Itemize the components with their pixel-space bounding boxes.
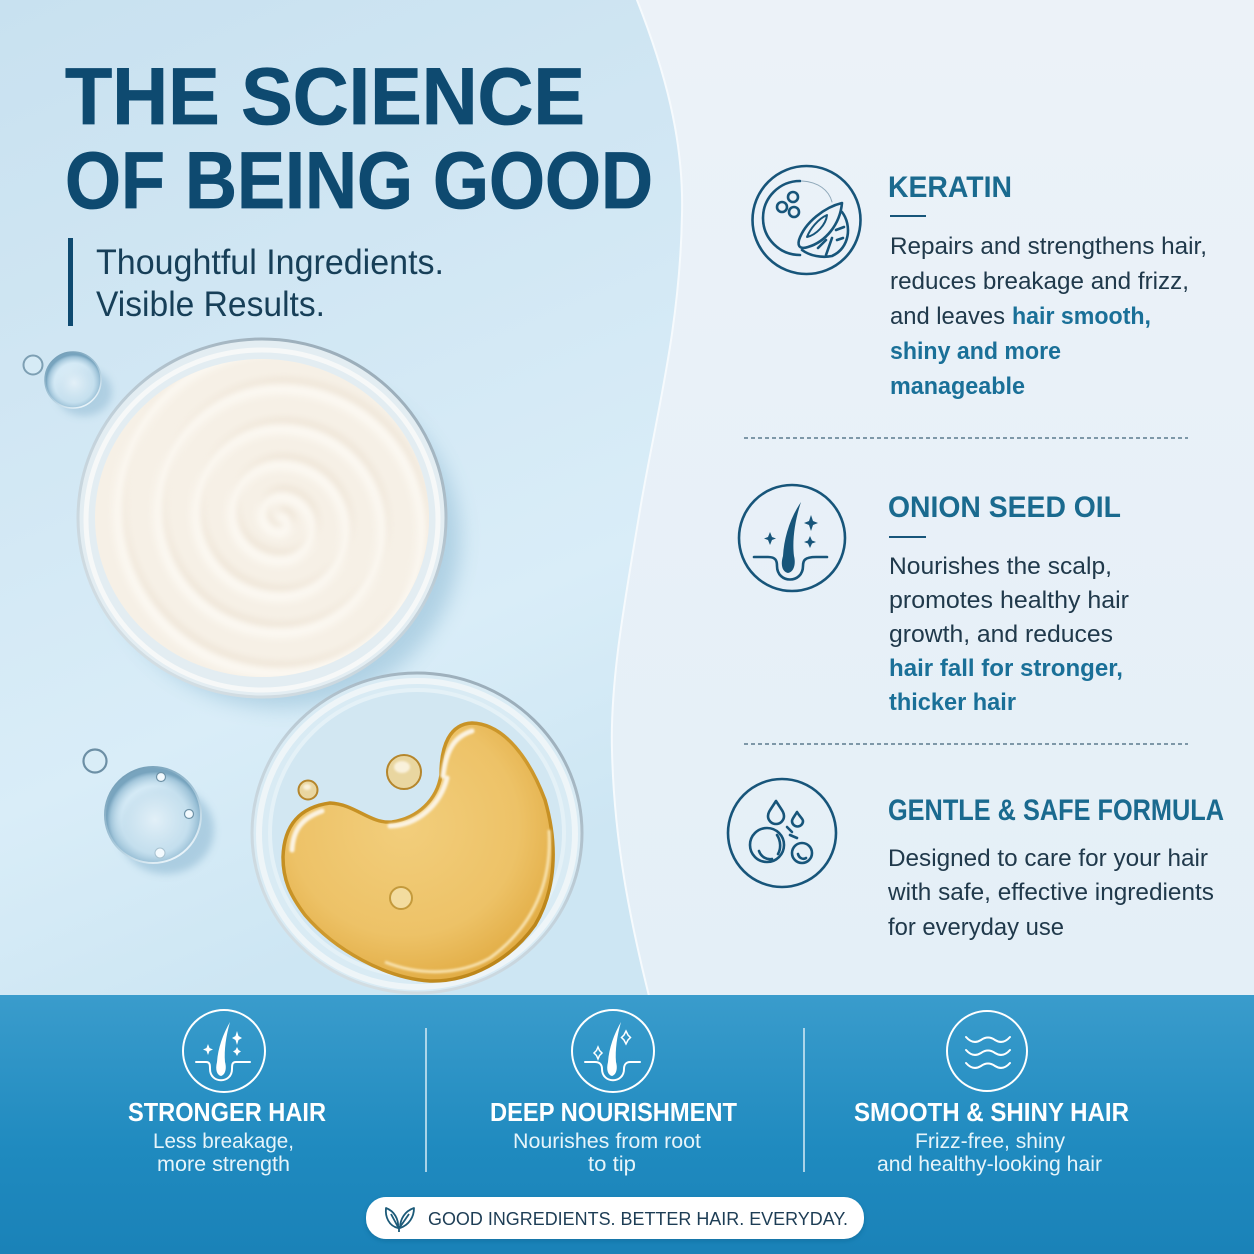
gentle formula text: with safe, effective ingredients — [887, 879, 1214, 906]
icon: leaves — [386, 1208, 414, 1232]
footer band — [0, 995, 1254, 1254]
keratin text: Repairs and strengthens hair, — [890, 233, 1207, 260]
water droplets — [24, 352, 214, 874]
icon: waves — [947, 1011, 1027, 1091]
benefit: deep nourishment: Nourishes from root — [513, 1130, 701, 1153]
icon: hair strength — [183, 1010, 265, 1092]
subtitle: Visible Results. — [96, 285, 325, 324]
gentle formula text: Designed to care for your hair — [888, 845, 1208, 872]
onion seed oil heading: ONION SEED OIL — [888, 491, 1121, 524]
benefit: deep nourishment: DEEP NOURISHMENT — [490, 1097, 737, 1127]
gentle formula text: for everyday use — [888, 914, 1064, 941]
ingredient: onion seed oil — [739, 485, 1129, 716]
subtitle — [68, 238, 444, 326]
benefit: smooth and shiny hair: and healthy-looking hair — [877, 1153, 1102, 1176]
oil pool — [283, 723, 553, 981]
benefit: smooth and shiny hair — [854, 1011, 1129, 1176]
benefit: stronger hair: STRONGER HAIR — [128, 1097, 326, 1127]
keratin text: reduces breakage and frizz, — [890, 268, 1189, 295]
title: THE SCIENCE — [65, 52, 585, 142]
keratin text: shiny and more — [890, 338, 1061, 365]
icon: hair root — [572, 1010, 654, 1092]
keratin text: manageable — [890, 373, 1025, 400]
onion seed oil text: hair fall for stronger, — [889, 655, 1123, 682]
benefit: deep nourishment — [490, 1010, 737, 1176]
icon: coconut — [752, 166, 860, 274]
title — [65, 52, 653, 226]
cream dish — [78, 339, 460, 708]
icon: drops and bubbles — [728, 779, 836, 887]
keratin text: hair smooth, — [1012, 303, 1151, 330]
benefit: smooth and shiny hair: Frizz-free, shiny — [915, 1130, 1066, 1153]
onion seed oil text — [889, 553, 1129, 716]
benefit: smooth and shiny hair: SMOOTH & SHINY HAIR — [854, 1097, 1129, 1127]
onion seed oil text: Nourishes the scalp, — [889, 553, 1112, 580]
keratin text: and leaves — [890, 303, 1005, 330]
onion seed oil text: thicker hair — [889, 689, 1016, 716]
oil droplets — [298, 755, 421, 909]
ingredient: keratin — [752, 166, 1207, 400]
onion seed oil text: promotes healthy hair — [889, 587, 1129, 614]
icon: hair follicle — [739, 485, 845, 591]
benefit: stronger hair: Less breakage, — [153, 1130, 294, 1153]
title: OF BEING GOOD — [65, 136, 653, 226]
tagline pill — [366, 1197, 864, 1241]
subtitle: Thoughtful Ingredients. — [96, 243, 444, 282]
left background panel — [0, 0, 700, 1000]
tagline pill: GOOD INGREDIENTS. BETTER HAIR. EVERYDAY. — [428, 1209, 848, 1229]
gentle formula text — [887, 845, 1214, 941]
keratin heading: KERATIN — [888, 171, 1012, 204]
benefit: stronger hair — [128, 1010, 326, 1176]
keratin text — [890, 233, 1207, 400]
ingredient: gentle and safe formula — [728, 779, 1224, 941]
right background panel with wave edge — [612, 0, 1254, 996]
onion seed oil text: growth, and reduces — [889, 621, 1113, 648]
cream swirl — [118, 342, 425, 673]
benefit: deep nourishment: to tip — [588, 1153, 636, 1176]
benefit: stronger hair: more strength — [157, 1153, 290, 1176]
oil dish — [252, 673, 582, 993]
